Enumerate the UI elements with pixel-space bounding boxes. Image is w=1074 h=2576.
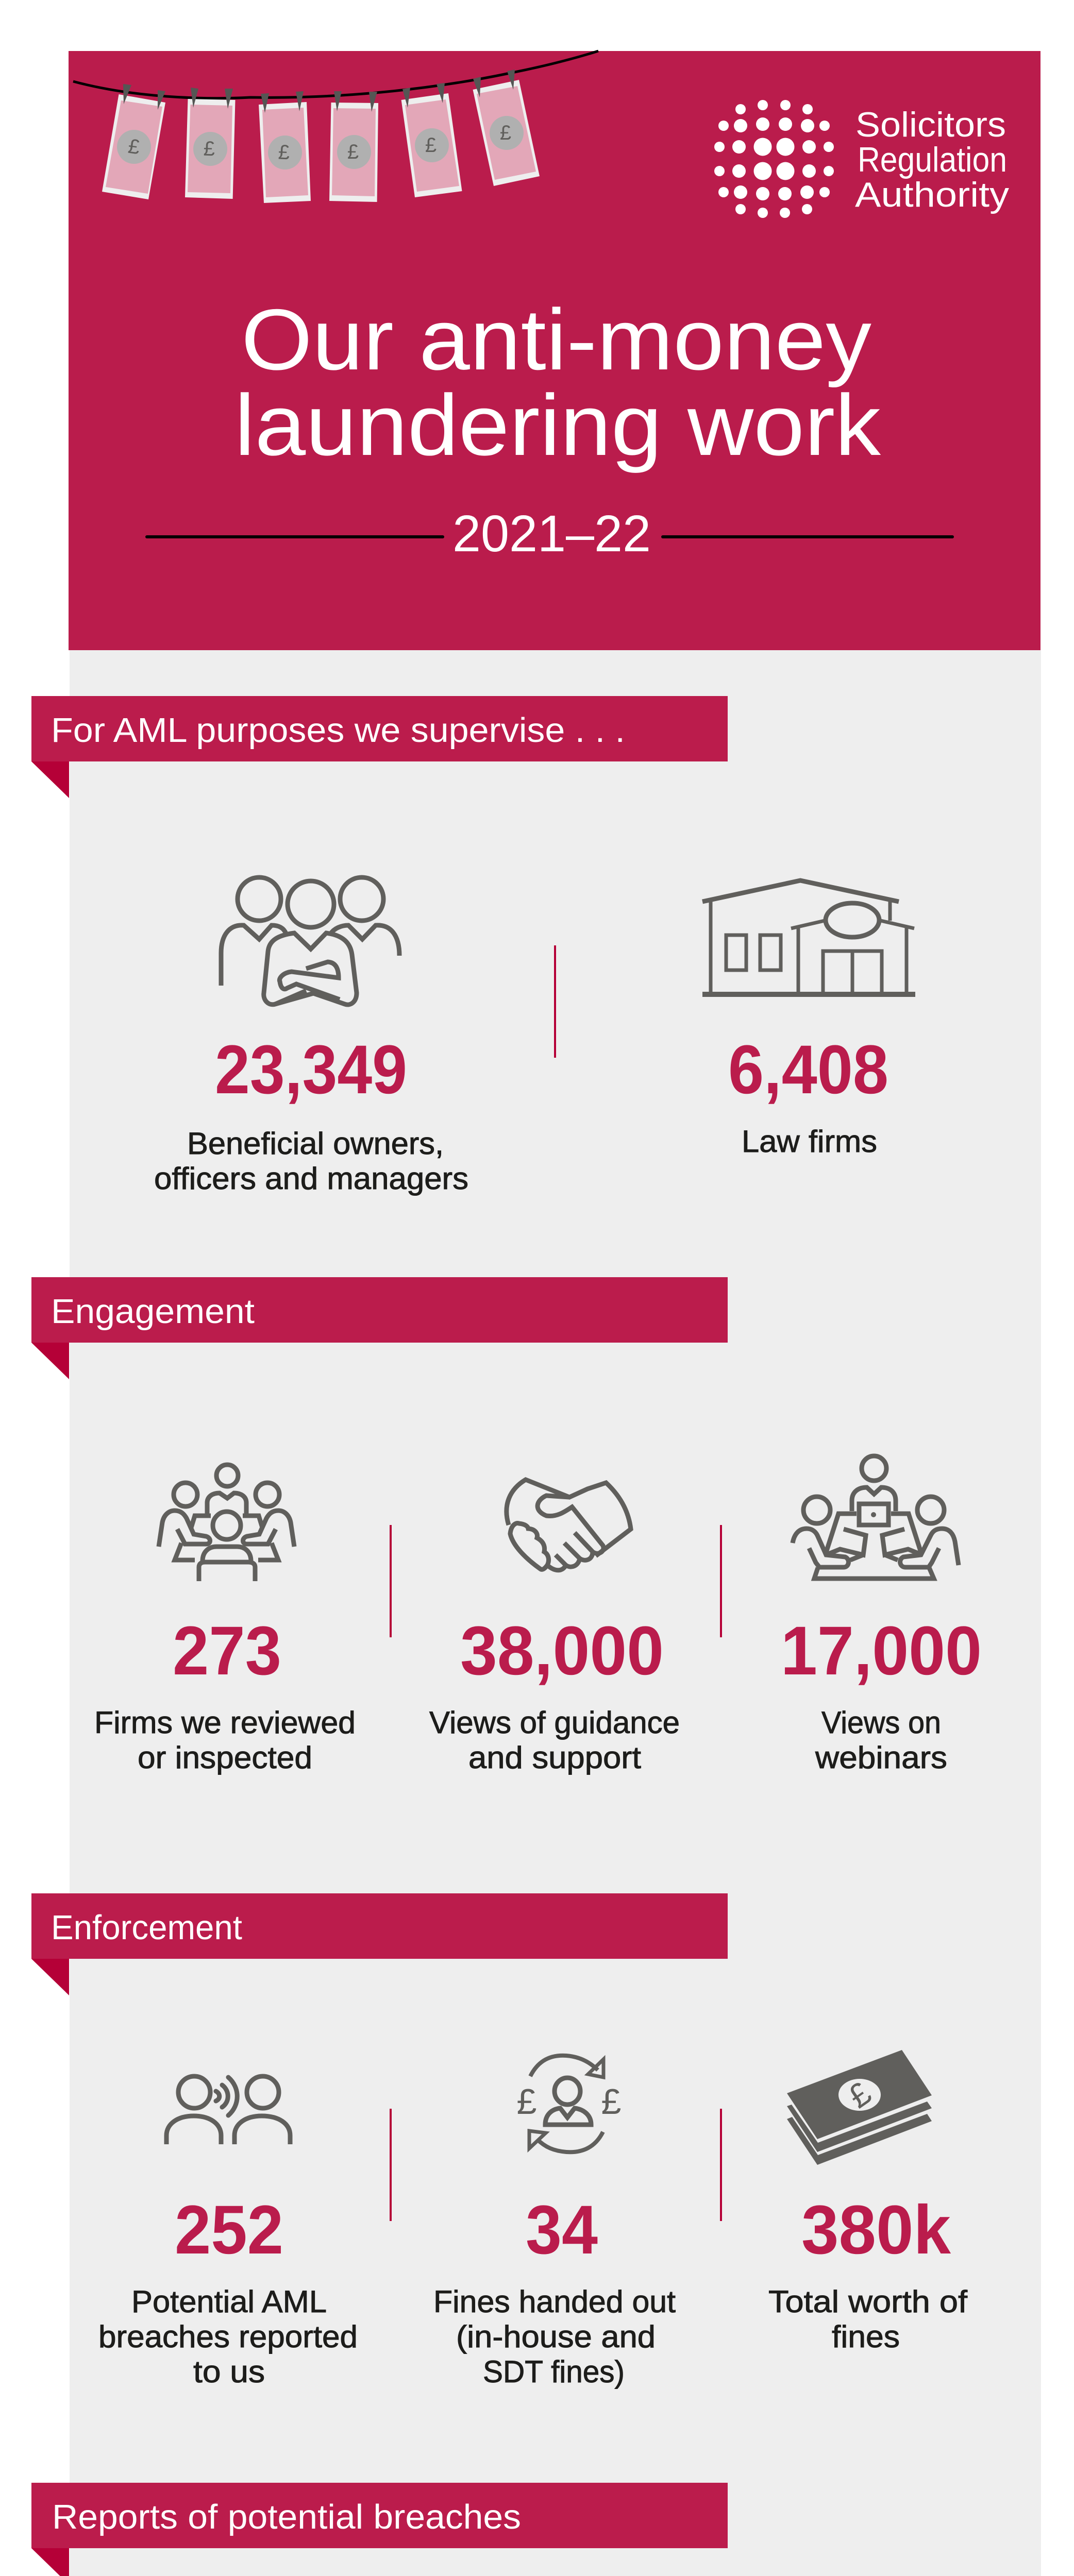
stat: 34 — [433, 2192, 676, 2389]
icon: banknotes on the line: £ — [203, 138, 215, 160]
section: supervision — [31, 696, 915, 1196]
panel: grey content background — [70, 650, 1041, 2576]
icon: stack of banknotes: £ — [842, 2074, 878, 2115]
title: Our anti-money — [241, 291, 871, 388]
icon: banknotes on the line: £ — [425, 134, 437, 157]
title — [234, 291, 881, 473]
icon: person with fines cycle: £ — [601, 2081, 621, 2122]
divider — [554, 945, 556, 1058]
icon: law firm building — [702, 880, 915, 997]
stat: 34: Fines handed out — [433, 2284, 676, 2319]
stat: 17,000 — [781, 1613, 982, 1775]
stat: 17,000: Views on — [821, 1705, 941, 1740]
stat: 38,000: and support — [468, 1740, 641, 1775]
stat: 273: 273 — [173, 1613, 281, 1689]
stat: 273: Firms we reviewed — [94, 1705, 356, 1740]
stat: 38,000 — [429, 1613, 680, 1775]
icon: three people arms crossed — [221, 877, 399, 1005]
washing line — [73, 51, 598, 98]
stat: 380k: 380k — [801, 2192, 951, 2268]
title: laundering work — [234, 377, 881, 473]
stat: 38,000: Views of guidance — [429, 1705, 680, 1740]
stat: 252: to us — [193, 2354, 265, 2389]
icon: webinar with laptops — [793, 1456, 959, 1579]
logo: Solicitors Regulation Authority: Authority — [855, 175, 1009, 214]
stat: 6,408: Law firms — [742, 1124, 877, 1159]
divider — [720, 2109, 722, 2221]
icon: banknotes on the line: £ — [127, 135, 141, 159]
stat: 252: breaches reported — [98, 2319, 358, 2354]
icon: banknotes on the line: £ — [347, 141, 359, 163]
icon: banknotes on the line: £ — [278, 141, 290, 164]
stat: 17,000: webinars — [815, 1740, 947, 1775]
stat: 34: SDT fines) — [483, 2354, 625, 2389]
divider — [720, 1525, 722, 1637]
icon: two people talking — [166, 2076, 290, 2144]
banner: Reports of potential breaches: Reports of potential breaches — [52, 2498, 521, 2536]
banner: Reports of potential breaches — [31, 2483, 728, 2576]
banner: For AML purposes: For AML purposes we supervise . . . — [51, 711, 625, 750]
logo: Solicitors Regulation Authority — [714, 100, 1009, 218]
stat: 34: 34 — [526, 2192, 598, 2268]
stat: 23,349: officers and managers — [154, 1161, 468, 1196]
icon: person with fines cycle — [517, 2056, 621, 2152]
year with rules — [145, 505, 954, 563]
stat: 252: 252 — [175, 2192, 283, 2268]
banner: Enforcement — [31, 1893, 728, 1995]
banner: Engagement — [31, 1277, 728, 1379]
stat: 23,349 — [154, 1031, 468, 1196]
stat: 380k — [768, 2192, 967, 2354]
divider — [390, 1525, 392, 1637]
stat: 380k: fines — [832, 2319, 900, 2354]
section: reports of potential breaches — [31, 2483, 1009, 2576]
icon: clothes pegs — [123, 70, 515, 113]
icon: stack of banknotes — [787, 2050, 932, 2165]
stat: 23,349: 23,349 — [215, 1031, 407, 1108]
icon: meeting of four people — [159, 1465, 294, 1581]
stat: 34: (in-house and — [456, 2319, 656, 2354]
stat: 380k: Total worth of — [768, 2284, 967, 2319]
stat: 252: Potential AML — [131, 2284, 327, 2319]
stat: 273: or inspected — [138, 1740, 312, 1775]
divider — [390, 2109, 392, 2221]
icon: banknotes on the line: £ — [500, 122, 511, 144]
year with rules: 2021–22 — [452, 505, 651, 563]
stat: 252 — [98, 2192, 358, 2389]
banner: Engagement: Engagement — [51, 1292, 255, 1331]
icon: handshake — [507, 1480, 631, 1570]
icon: banknotes on the line — [102, 80, 540, 203]
stat: 6,408: 6,408 — [728, 1031, 888, 1108]
logo: Solicitors Regulation Authority: Regulation — [858, 140, 1007, 179]
panel: header — [69, 51, 1041, 650]
banner: Enforcement: Enforcement — [51, 1908, 242, 1947]
stat: 17,000: 17,000 — [781, 1613, 982, 1689]
stat: 273 — [94, 1613, 356, 1775]
logo: Solicitors Regulation Authority: Solicitors — [855, 105, 1006, 144]
icon: person with fines cycle: £ — [517, 2081, 536, 2122]
section: engagement — [31, 1277, 982, 1775]
section: enforcement — [31, 1893, 967, 2389]
stat: 6,408 — [728, 1031, 888, 1159]
stat: 38,000: 38,000 — [460, 1613, 664, 1689]
banner: For AML purposes — [31, 696, 728, 798]
stat: 23,349: Beneficial owners, — [187, 1126, 444, 1161]
